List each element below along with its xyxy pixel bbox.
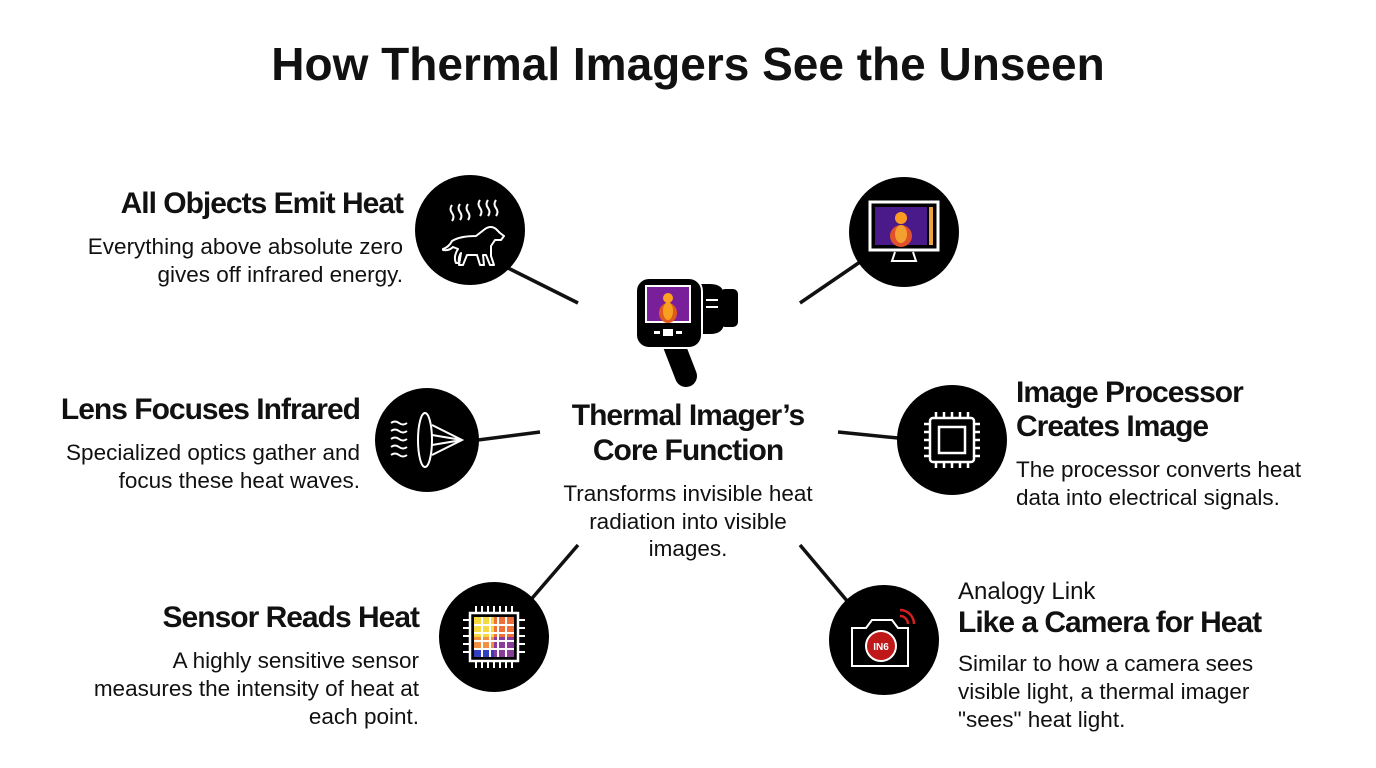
text: core function: Core Function xyxy=(593,434,783,467)
text: all objects emit heat: gives off infrared energy. xyxy=(157,262,403,287)
text: camera analogy: Analogy Link xyxy=(958,578,1095,605)
text: camera analogy: "sees" heat light. xyxy=(958,707,1125,732)
icon: lens xyxy=(375,388,479,492)
text: all objects emit heat: Everything above absolute zero xyxy=(88,234,403,259)
text: lens focuses infrared xyxy=(61,393,360,493)
icon: camera: IN6 xyxy=(873,642,889,653)
text: core function xyxy=(563,399,813,561)
text: lens focuses infrared: focus these heat waves. xyxy=(119,468,360,493)
text: image processor: Creates Image xyxy=(1016,410,1208,443)
text: camera analogy: Like a Camera for Heat xyxy=(958,606,1261,639)
icon: camera xyxy=(829,585,939,695)
icon: thermal camera xyxy=(636,278,738,376)
text: sensor reads heat: each point. xyxy=(309,704,419,729)
text: image processor: data into electrical signals. xyxy=(1016,485,1280,510)
text: lens focuses infrared: Specialized optics gather and xyxy=(66,440,360,465)
text: sensor reads heat: Sensor Reads Heat xyxy=(163,601,419,634)
text: camera analogy xyxy=(958,578,1262,732)
text: core function: Thermal Imager’s xyxy=(572,399,804,432)
text: image processor: Image Processor xyxy=(1016,376,1243,409)
text: sensor reads heat: measures the intensity of heat at xyxy=(94,676,419,701)
text: lens focuses infrared: Lens Focuses Infrared xyxy=(61,393,360,426)
icon: heat dog xyxy=(415,175,525,285)
text: all objects emit heat xyxy=(88,187,404,287)
text: image processor: The processor converts heat xyxy=(1016,457,1301,482)
text: sensor reads heat: A highly sensitive sensor xyxy=(173,648,419,673)
text: camera analogy: Similar to how a camera sees xyxy=(958,651,1253,676)
text: core function: Transforms invisible heat xyxy=(563,481,813,506)
icon: processor chip xyxy=(897,385,1007,495)
text: camera analogy: visible light, a thermal imager xyxy=(958,679,1249,704)
icon: monitor xyxy=(849,177,959,287)
icon: sensor grid xyxy=(439,582,549,692)
text: core function: radiation into visible xyxy=(589,508,787,534)
connector lines xyxy=(478,262,898,603)
text: core function: images. xyxy=(649,536,727,561)
text: sensor reads heat xyxy=(94,601,420,729)
title: How Thermal Imagers See the Unseen xyxy=(271,38,1105,90)
text: all objects emit heat: All Objects Emit Heat xyxy=(121,187,403,220)
text: image processor xyxy=(1016,376,1301,510)
